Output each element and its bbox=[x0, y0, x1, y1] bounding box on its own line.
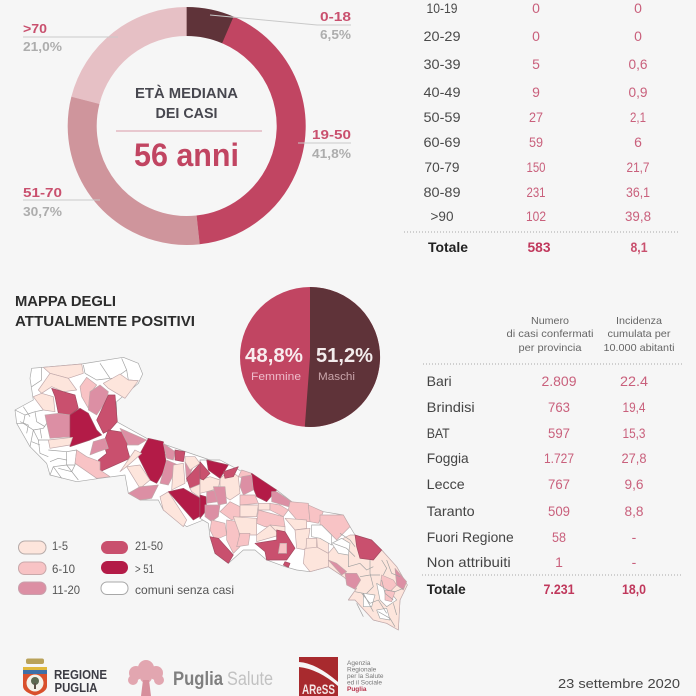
table: deaths by age: 102 bbox=[526, 208, 546, 224]
logo: AReSS bbox=[299, 657, 384, 696]
donut centre text: ETÀ MEDIANA bbox=[135, 85, 238, 102]
logo: Puglia Salute: Puglia bbox=[173, 669, 223, 690]
table: cases by province: - bbox=[632, 529, 637, 545]
donut label: 19-50: 41,8% bbox=[312, 147, 351, 161]
pie chart: cases by sex: Femmine bbox=[251, 371, 301, 383]
map of Puglia bbox=[15, 357, 407, 630]
table header: province columns bbox=[506, 315, 674, 354]
map heading: ATTUALMENTE POSITIVI bbox=[15, 313, 195, 330]
table: deaths by age: 0 bbox=[634, 28, 642, 44]
table: deaths by age: 6 bbox=[634, 134, 642, 150]
table: deaths by age: 40-49 bbox=[424, 84, 461, 100]
pie chart: cases by sex: 51,2% bbox=[316, 345, 373, 367]
table header: province columns: cumulata per bbox=[608, 328, 671, 340]
table: cases by province: 2.809 bbox=[542, 373, 577, 389]
table: cases by province: 18,0 bbox=[622, 581, 646, 597]
table: deaths by age: 20-29 bbox=[424, 28, 461, 44]
table: cases by province: 1 bbox=[555, 554, 563, 570]
logo: AReSS: ed il Sociale bbox=[347, 680, 382, 686]
table header: province columns: di casi confermati bbox=[506, 328, 594, 340]
donut label: 0-18: 6,5% bbox=[320, 28, 351, 42]
table: deaths by age: 0,9 bbox=[628, 84, 648, 100]
map legend: 21-50 bbox=[135, 539, 163, 553]
map legend: 1-5 bbox=[52, 539, 68, 553]
pie chart: cases by sex: 48,8% bbox=[245, 345, 303, 367]
logo: AReSS: Regionale bbox=[347, 666, 377, 674]
map heading: MAPPA DEGLI bbox=[15, 293, 116, 310]
table: cases by province: Lecce bbox=[427, 476, 465, 492]
table: deaths by age: 27 bbox=[529, 109, 543, 125]
donut label: 0-18 bbox=[320, 10, 351, 42]
map legend: > 51 bbox=[135, 562, 154, 576]
table: deaths by age: 21,7 bbox=[626, 159, 650, 175]
map heading bbox=[15, 293, 195, 330]
table: deaths by age: 8,1 bbox=[630, 239, 648, 255]
donut leader lines bbox=[23, 15, 351, 200]
donut centre text: DEI CASI bbox=[156, 105, 218, 122]
table: cases by province bbox=[422, 364, 683, 597]
table: cases by province: 763 bbox=[548, 399, 570, 415]
table header: province columns: Incidenza bbox=[616, 315, 662, 327]
table: deaths by age: 0 bbox=[634, 0, 642, 16]
table: deaths by age: 9 bbox=[532, 84, 540, 100]
table: cases by province: 27,8 bbox=[622, 450, 647, 466]
donut centre text bbox=[116, 85, 262, 173]
map legend bbox=[18, 539, 234, 597]
logo: Regione Puglia: REGIONE bbox=[54, 668, 107, 682]
table: cases by province: 8,8 bbox=[624, 503, 644, 519]
table: cases by province: Totale bbox=[427, 581, 466, 597]
table: deaths by age: 39,8 bbox=[625, 208, 651, 224]
table: cases by province: Non attribuiti bbox=[427, 554, 511, 570]
table header: province columns: Numero bbox=[531, 315, 569, 327]
donut label: 19-50: 19-50 bbox=[312, 128, 351, 142]
table: deaths by age: 30-39 bbox=[424, 56, 461, 72]
table: deaths by age: 59 bbox=[529, 134, 543, 150]
logo: Regione Puglia bbox=[23, 658, 107, 696]
table: cases by province: 1.727 bbox=[544, 450, 574, 466]
donut centre text: 56 anni bbox=[134, 137, 239, 173]
table: deaths by age: 36,1 bbox=[626, 184, 650, 200]
donut label: 0-18: 0-18 bbox=[320, 10, 351, 24]
table: deaths by age: 583 bbox=[528, 239, 551, 255]
table: deaths by age: Totale bbox=[428, 239, 468, 255]
logo: AReSS: Agenzia bbox=[347, 660, 371, 667]
donut label: 51-70 bbox=[23, 186, 62, 219]
table: deaths by age: 70-79 bbox=[424, 159, 460, 175]
table: cases by province: - bbox=[632, 554, 637, 570]
donut label: 51-70: 51-70 bbox=[23, 186, 62, 200]
logo: AReSS: Puglia bbox=[347, 686, 367, 693]
logo: AReSS: per la Salute bbox=[347, 673, 384, 680]
donut label: >70: >70 bbox=[23, 22, 47, 36]
table: deaths by age: 10-19 bbox=[426, 0, 458, 16]
donut label: >70 bbox=[23, 22, 62, 54]
logo: Regione Puglia: PUGLIA bbox=[54, 681, 98, 695]
map legend: 6-10 bbox=[52, 562, 75, 576]
donut label: 19-50 bbox=[312, 128, 351, 161]
table: cases by province: BAT bbox=[427, 425, 450, 441]
table: cases by province: 7.231 bbox=[544, 581, 575, 597]
table: deaths by age: 80-89 bbox=[424, 184, 461, 200]
table: cases by province: 9,6 bbox=[624, 476, 644, 492]
table: cases by province: 58 bbox=[552, 529, 566, 545]
table: cases by province: 767 bbox=[548, 476, 570, 492]
table: deaths by age: 0 bbox=[532, 28, 540, 44]
date: 23 settembre 2020 bbox=[558, 676, 680, 691]
table: deaths by age: 50-59 bbox=[424, 109, 461, 125]
table: cases by province: 509 bbox=[548, 503, 570, 519]
table: cases by province: 597 bbox=[548, 425, 570, 441]
table: deaths by age: 60-69 bbox=[424, 134, 461, 150]
logo: Puglia Salute bbox=[128, 660, 273, 696]
table header: province columns: 10.000 abitanti bbox=[604, 342, 674, 354]
table: cases by province: 19,4 bbox=[622, 399, 646, 415]
pie chart: cases by sex: Maschi bbox=[318, 371, 355, 383]
donut chart: median age of cases bbox=[49, 0, 324, 263]
map legend: comuni senza casi bbox=[135, 583, 234, 597]
table: cases by province: Brindisi bbox=[427, 399, 475, 415]
donut label: 51-70: 30,7% bbox=[23, 205, 62, 219]
table: deaths by age bbox=[404, 0, 680, 255]
donut label: >70: 21,0% bbox=[23, 40, 62, 54]
table: cases by province: Taranto bbox=[427, 503, 475, 519]
table: cases by province: Fuori Regione bbox=[427, 529, 514, 545]
table: deaths by age: 231 bbox=[526, 184, 546, 200]
table: deaths by age: 2,1 bbox=[630, 109, 646, 125]
table: cases by province: Bari bbox=[427, 373, 452, 389]
table: cases by province: Foggia bbox=[427, 450, 469, 466]
pie chart: cases by sex bbox=[240, 287, 380, 427]
table: deaths by age: 5 bbox=[532, 56, 540, 72]
table: deaths by age: 150 bbox=[526, 159, 546, 175]
table: deaths by age: 0 bbox=[532, 0, 540, 16]
map legend: 11-20 bbox=[52, 583, 80, 597]
table: deaths by age: 0,6 bbox=[628, 56, 648, 72]
table header: province columns: per provincia bbox=[518, 342, 582, 354]
table: cases by province: 22.4 bbox=[620, 373, 648, 389]
table: cases by province: 15,3 bbox=[622, 425, 646, 441]
logo: Puglia Salute: Salute bbox=[227, 669, 273, 690]
table: deaths by age: >90 bbox=[430, 208, 454, 224]
